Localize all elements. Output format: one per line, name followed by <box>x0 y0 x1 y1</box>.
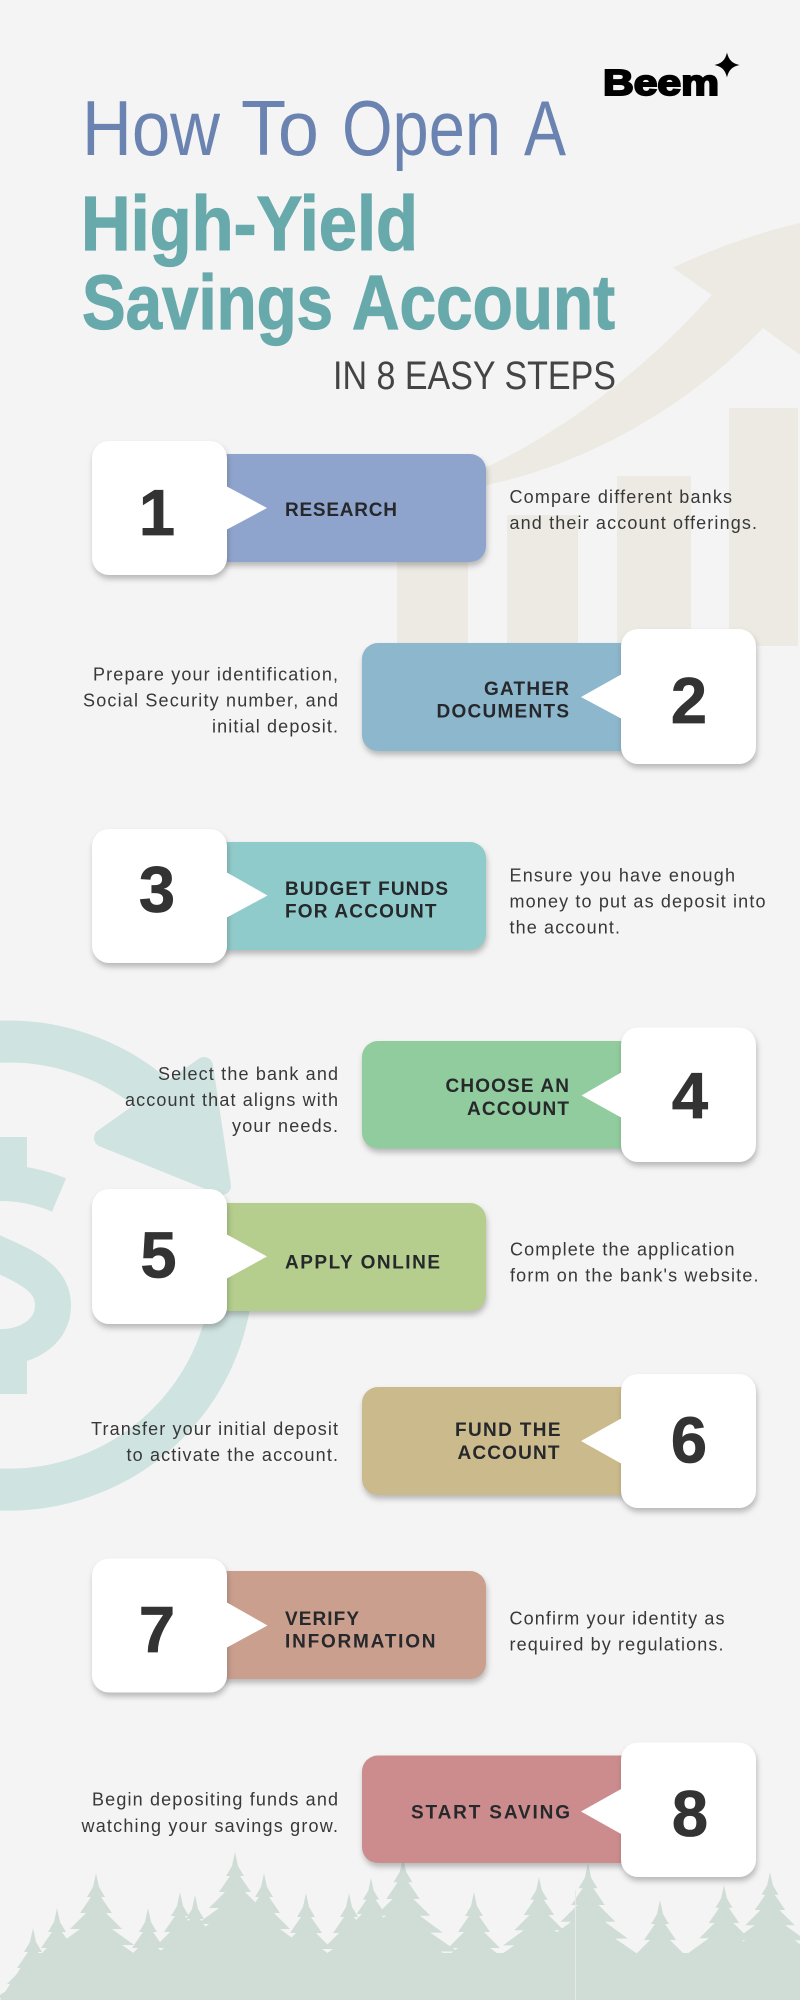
step label: GATHER <box>484 679 569 700</box>
pointer <box>582 1072 622 1118</box>
label bar <box>362 1756 652 1863</box>
logo: Beem <box>603 52 740 103</box>
pointer <box>226 1602 268 1648</box>
step label: ACCOUNT <box>467 1099 569 1120</box>
pointer <box>581 1788 622 1834</box>
description <box>80 1790 338 1836</box>
number: 8 <box>672 1777 708 1850</box>
background illustration: dollar coin with arrow <box>0 1042 233 1490</box>
description <box>91 1419 338 1465</box>
description: Transfer your initial deposit <box>91 1419 338 1439</box>
pointer <box>226 486 267 530</box>
label bar <box>200 1203 486 1311</box>
label bar <box>200 842 486 950</box>
step label: FOR ACCOUNT <box>285 902 437 922</box>
background illustration: bar chart with rising arrow <box>397 223 800 646</box>
step label: START SAVING <box>411 1802 570 1824</box>
description: Complete the application <box>510 1240 734 1260</box>
panel: step 3 budget funds <box>92 829 766 963</box>
description: Social Security number, and <box>83 690 338 710</box>
description <box>510 1240 758 1286</box>
description: form on the bank's website. <box>510 1266 758 1286</box>
number card <box>621 1742 756 1877</box>
description: Select the bank and <box>158 1064 338 1084</box>
title line: How To Open A <box>82 84 566 172</box>
panel: step 8 start saving <box>80 1742 756 1877</box>
label bar <box>362 1387 652 1495</box>
description: Ensure you have enough <box>510 866 735 886</box>
step label: ACCOUNT <box>458 1443 560 1464</box>
title line: High-Yield: High-Yield <box>81 181 418 267</box>
panel: step 5 apply online <box>92 1189 758 1324</box>
number: 3 <box>139 853 175 926</box>
step label: DOCUMENTS <box>436 702 569 722</box>
pointer <box>226 1234 267 1279</box>
title line: How To Open A: How <box>82 84 221 172</box>
description: account that aligns with <box>125 1090 338 1110</box>
label bar <box>200 1571 486 1679</box>
step label: APPLY ONLINE <box>285 1252 440 1274</box>
description: money to put as deposit into <box>510 892 766 912</box>
number: 4 <box>672 1059 708 1132</box>
step label <box>455 1420 560 1464</box>
panel: step 2 gather documents <box>83 629 756 764</box>
title <box>81 84 616 398</box>
description: Prepare your identification, <box>93 664 338 684</box>
description: required by regulations. <box>510 1634 724 1654</box>
title line: Savings Account: Savings <box>82 260 333 346</box>
description: your needs. <box>232 1116 338 1136</box>
step label: FUND THE <box>455 1420 560 1441</box>
description: Compare different banks <box>510 487 732 507</box>
step label <box>436 679 569 722</box>
logo: Beem: Beem <box>603 62 719 103</box>
step label: RESEARCH <box>285 500 397 521</box>
number: 7 <box>139 1593 175 1666</box>
panel: step 1 research <box>92 441 757 575</box>
number card <box>92 441 227 575</box>
description <box>510 1608 724 1654</box>
description <box>83 664 338 736</box>
label bar <box>362 1041 652 1148</box>
description: watching your savings grow. <box>80 1816 338 1836</box>
description <box>510 866 766 938</box>
description: the account. <box>510 918 620 938</box>
description: initial deposit. <box>212 716 338 736</box>
title line: Savings Account <box>82 260 615 346</box>
panel: step 7 verify information <box>92 1558 724 1692</box>
description <box>510 487 757 533</box>
pointer <box>581 1418 622 1464</box>
title line: How To Open A: To <box>241 84 319 172</box>
description <box>125 1064 338 1136</box>
step label <box>285 1609 436 1652</box>
number card <box>621 629 756 764</box>
title line: Savings Account: Account <box>352 260 615 346</box>
background illustration: pine tree line <box>0 1852 800 2000</box>
label bar <box>362 643 652 751</box>
number card <box>621 1028 756 1162</box>
subtitle: IN 8 EASY STEPS <box>333 354 616 398</box>
description: Begin depositing funds and <box>92 1790 338 1810</box>
step label: BUDGET FUNDS <box>285 879 448 900</box>
step label <box>285 879 448 922</box>
number card <box>92 1558 227 1692</box>
number: 6 <box>671 1404 707 1476</box>
number card <box>621 1374 756 1508</box>
title line: How To Open A: A <box>524 84 566 172</box>
number: 1 <box>139 476 175 549</box>
title line: How To Open A: Open <box>342 84 501 172</box>
step label <box>446 1076 569 1120</box>
number: 5 <box>140 1218 177 1292</box>
panel: step 6 fund the account <box>91 1374 756 1508</box>
description: to activate the account. <box>126 1445 338 1465</box>
pointer <box>581 674 622 719</box>
panel: step 4 choose an account <box>125 1028 756 1162</box>
number card <box>92 1189 227 1324</box>
step label: VERIFY <box>285 1609 359 1630</box>
pointer <box>226 872 268 918</box>
description: and their account offerings. <box>510 513 757 533</box>
description: Confirm your identity as <box>510 1608 724 1628</box>
number: 2 <box>671 664 707 737</box>
step label: INFORMATION <box>285 1632 436 1652</box>
step label: CHOOSE AN <box>446 1076 569 1097</box>
label bar <box>200 454 486 562</box>
number card <box>92 829 227 963</box>
